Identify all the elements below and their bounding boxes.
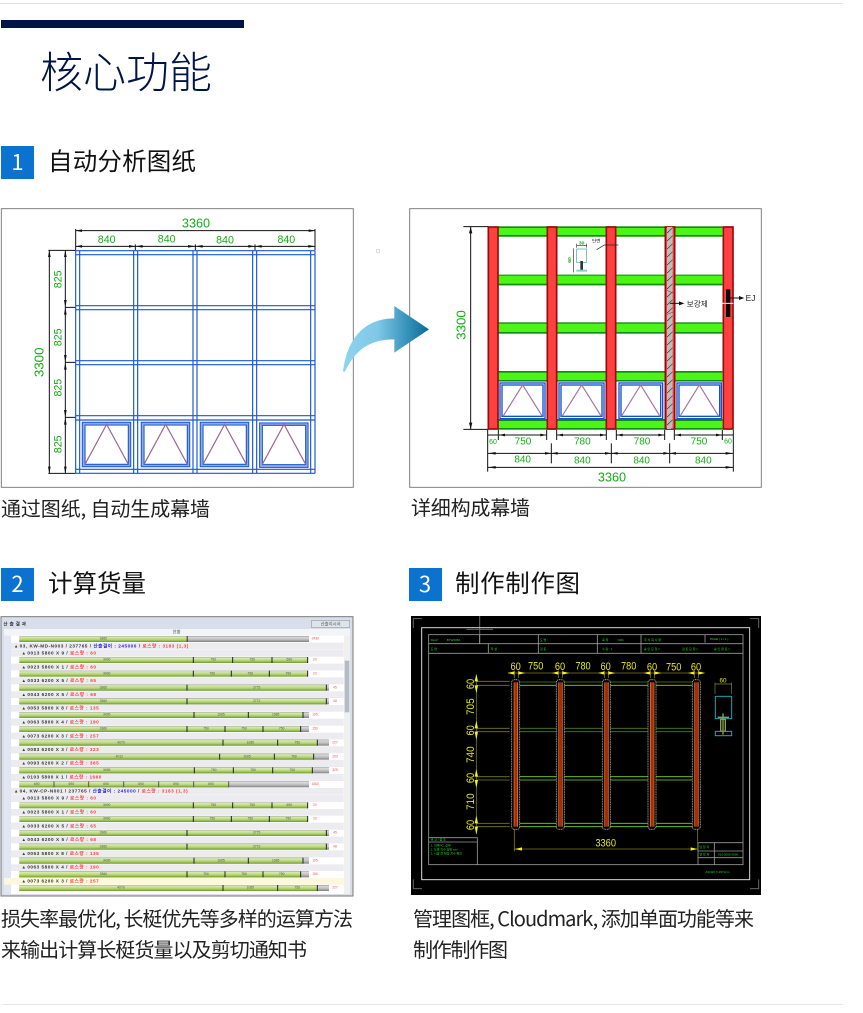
- row labels: [14, 642, 189, 884]
- inner frame and title block: [429, 635, 743, 865]
- dimension labels: 840: [98, 234, 116, 246]
- stock bars: 690: [34, 782, 40, 786]
- beams: [520, 682, 693, 827]
- dimension labels: 60: [555, 661, 565, 673]
- button: [312, 620, 350, 628]
- stock bars: 20: [313, 817, 317, 821]
- stock bars: 20: [313, 803, 317, 807]
- caption 4: 管理图框, Cloudmark, 添加单面功能等来: [413, 903, 754, 932]
- stock bars: 750: [248, 671, 253, 675]
- row labels: ▴ 0073 6200 X 3 / 로스량 : 257: [22, 732, 99, 738]
- callout: reinforcement: 보강제: [687, 298, 708, 308]
- stock bars: 3490: [103, 817, 111, 821]
- row labels: ▴ 0023 5800 X 1 / 로스량 : 60: [22, 663, 96, 669]
- stock bars: 2430: [312, 637, 319, 641]
- title block text: 1. 하부PC, 상부: [431, 842, 451, 847]
- dimension labels: 840: [633, 455, 650, 466]
- scrollbar: [344, 636, 350, 894]
- dimension labels: [453, 310, 732, 484]
- title block text: 축 척 : CM1: [602, 637, 624, 642]
- dimension labels: 750: [515, 437, 532, 448]
- section 1 heading: 1: [11, 145, 24, 177]
- windows: [82, 422, 308, 467]
- dimension labels: 60: [691, 662, 701, 674]
- stock bars: 3360: [100, 685, 107, 689]
- dimension labels: 60: [465, 773, 477, 783]
- stock bars: 1085: [217, 713, 225, 717]
- stock bars: 3490: [103, 671, 111, 675]
- dimension labels: 780: [575, 661, 591, 673]
- row labels: ▴ 04, KW-CP-N001 / 237765 / 산출결이 : 245000 / 로스량 : 3183 (1,3): [14, 788, 188, 795]
- stock bars: 750: [250, 768, 256, 772]
- stock bars: 750: [241, 872, 247, 876]
- dimension labels: 825: [53, 435, 65, 453]
- windows: [499, 382, 722, 419]
- title accent bar: [1, 20, 244, 28]
- title block text: Rev# : BTW2050: [431, 638, 460, 642]
- panel: CAD drawing: [411, 616, 761, 895]
- caption 3: 损失率最优化, 长梃优先等多样的运算方法: [1, 903, 353, 932]
- dimension labels: 710: [465, 793, 477, 810]
- title: 核心功能: [40, 39, 212, 101]
- stock bars: 750: [286, 817, 291, 821]
- button: 산출지시서: [321, 621, 341, 628]
- section detail inset: 단면: [592, 237, 601, 243]
- outer frame: [422, 628, 750, 880]
- title block text: 주 식 회 사 ㈜: [644, 637, 661, 642]
- stock bars: 750: [250, 803, 255, 807]
- title block text: 도 면 :: [431, 646, 439, 651]
- stock bars: 325: [332, 768, 338, 772]
- stock bars: 48: [333, 844, 337, 848]
- dimension labels: 3300: [32, 348, 47, 377]
- row labels: ▴ 0063 5800 X 4 / 로스량 : 190: [22, 718, 99, 724]
- dimension labels: [32, 217, 295, 453]
- stock bars: 750: [279, 727, 285, 731]
- stock bars: 750: [203, 727, 209, 731]
- stock bars: 750: [211, 658, 216, 662]
- section detail inset: [567, 237, 618, 272]
- stock bars: 1600: [312, 782, 319, 786]
- dimension labels: 60: [465, 679, 477, 689]
- hatched reinforced column: [665, 227, 675, 429]
- row labels: ▴ 0053 5800 X 8 / 로스량 : 135: [22, 850, 99, 856]
- bottom rule: [2, 1004, 843, 1005]
- stock bars: 3495: [103, 768, 111, 772]
- stock bars: 1085: [243, 754, 251, 758]
- stock bars: 3360: [100, 872, 107, 876]
- stock bars: 2772: [253, 699, 261, 703]
- dimension labels: 3360: [182, 217, 210, 231]
- callout: EJ: EJ: [746, 293, 755, 303]
- stock bars: 3490: [103, 658, 111, 662]
- panel: quantity calculation screen: 산출결과: [3, 621, 27, 628]
- dimension labels: 60: [724, 439, 732, 446]
- title block text: PAGE ( 1 / 1 ): [710, 637, 728, 641]
- stock bars: 750: [211, 768, 217, 772]
- stock bars: 227: [332, 740, 338, 744]
- stock bars: 690: [173, 782, 179, 786]
- section detail: [715, 677, 732, 736]
- title block text: 도 명 :: [540, 637, 548, 642]
- stock bars: 750: [210, 817, 215, 821]
- top rule: [0, 3, 843, 4]
- stock bars: 690: [287, 658, 292, 662]
- section 1 heading: 自动分析图纸: [48, 143, 196, 178]
- caption 3: [1, 903, 353, 963]
- row labels: ▴ 0043 6200 X 5 / 로스량 : 68: [22, 836, 96, 842]
- stock bars: 1085: [272, 858, 280, 862]
- stock bars: [19, 636, 338, 891]
- dimension labels: 60: [465, 820, 477, 830]
- columns: [512, 680, 700, 829]
- dimension labels: 3360: [595, 837, 616, 849]
- stock bars: 750: [286, 671, 291, 675]
- dimension labels: 840: [216, 234, 234, 246]
- stock bars: 3495: [103, 858, 111, 862]
- row labels: ▴ 0023 5800 X 1 / 로스량 : 60: [22, 808, 96, 814]
- stock bars: 3490: [103, 803, 111, 807]
- stock bars: 1085: [272, 713, 280, 717]
- stock bars: 105: [312, 858, 318, 862]
- stock bars: 45: [333, 685, 337, 689]
- title block text: 검 토 :: [540, 646, 548, 651]
- stock bars: 4012: [116, 754, 123, 758]
- section detail inset: 60: [567, 257, 573, 263]
- dimension labels: 3360: [598, 470, 626, 484]
- section detail: 60: [719, 677, 727, 684]
- dimension labels: 750: [666, 662, 681, 674]
- panel: quantity calculation screen: [1, 617, 353, 896]
- dimension labels: 750: [528, 661, 543, 673]
- row labels: ▴ 0033 6200 X 5 / 로스량 : 65: [22, 677, 96, 683]
- stock bars: 690: [138, 782, 144, 786]
- curtain wall grid: [76, 250, 315, 473]
- dimension labels: 705: [465, 698, 477, 715]
- stock bars: 750: [241, 727, 247, 731]
- dimension labels: 60: [510, 661, 521, 673]
- panel: detailed drawing: [410, 209, 761, 487]
- row labels: ▴ 0083 6200 X 3 / 로스량 : 323: [22, 746, 99, 752]
- title block text: 작 성 :: [491, 646, 499, 651]
- stock bars: 2775: [253, 831, 261, 835]
- dimension arrows: [475, 671, 705, 851]
- panel: quantity calculation screen: 현황: [173, 629, 181, 635]
- row labels: ▴ 0103 5800 X 1 / 로스량 : 1660: [22, 774, 102, 780]
- section 2 heading: [1, 565, 146, 601]
- stock bars: 690: [287, 803, 292, 807]
- stock bars: 227: [332, 886, 338, 890]
- dimension labels: 60: [647, 662, 657, 674]
- title block text: 비 고 / 참 조: [431, 837, 446, 842]
- stock bars: 750: [291, 754, 297, 758]
- stock bars: 750: [210, 671, 215, 675]
- dimension lines: [463, 227, 733, 472]
- stock bars: 2775: [253, 685, 261, 689]
- stock bars: 293: [332, 754, 338, 758]
- title block text: A3(420 X 297)mm: [705, 870, 730, 874]
- dimension labels: 825: [53, 270, 65, 288]
- dimension labels: 840: [277, 234, 295, 246]
- stock bars: 3360: [100, 831, 107, 835]
- row labels: ▴ 0033 6200 X 5 / 로스량 : 65: [22, 822, 96, 828]
- stock bars: 20: [313, 658, 317, 662]
- title block text: 승 인 요 청 □: [644, 646, 660, 651]
- caption 1: 通过图纸, 自动生成幕墙: [1, 493, 210, 522]
- title block text: 승 인 완 료 □: [714, 646, 730, 651]
- row labels: ▴ 03, KW-MD-N003 / 237765 / 산출결이 : 245000 / 로스량 : 3183 (1,3): [14, 642, 189, 649]
- stock bars: 750: [203, 872, 209, 876]
- row labels: ▴ 0063 5800 X 4 / 로스량 : 190: [22, 864, 99, 870]
- title block text: [431, 637, 739, 874]
- caption 4: 制作制作图: [413, 934, 508, 963]
- dimension labels: 740: [465, 746, 477, 763]
- stock bars: 1085: [217, 858, 225, 862]
- stock bars: 750: [290, 768, 295, 772]
- title block text: 연 락 처: [699, 851, 709, 856]
- row labels: ▴ 0013 5800 X 9 / 로스량 : 60: [22, 649, 96, 655]
- stock bars: 690: [69, 782, 74, 786]
- stock bars: 3360: [100, 844, 107, 848]
- dimension labels: 60: [600, 661, 611, 673]
- stock bars: 750: [279, 872, 285, 876]
- stock bars: 3360: [100, 699, 107, 703]
- stock bars: 1085: [247, 886, 254, 890]
- title block text: 3. 시공 전 현장 치수 확인: [431, 850, 462, 855]
- caption 4: [413, 903, 754, 963]
- corner marks: [413, 616, 759, 889]
- stock bars: 105: [312, 713, 318, 717]
- dimension labels: 825: [53, 328, 65, 346]
- dimension labels: 825: [53, 379, 65, 397]
- stock bars: 4070: [117, 886, 125, 890]
- row labels: ▴ 0053 5800 X 8 / 로스량 : 135: [22, 705, 99, 711]
- stock bars: 48: [333, 699, 337, 703]
- stock bars: 4070: [117, 740, 125, 744]
- caption 2: 详细构成幕墙: [411, 492, 530, 521]
- stock bars: 150: [312, 727, 318, 731]
- dimension labels: 840: [158, 233, 176, 245]
- stock bars: 690: [103, 782, 109, 786]
- stock bars: 750: [295, 886, 300, 890]
- caption 3: 来输出计算长梃货量以及剪切通知书: [1, 934, 307, 963]
- dimension labels: [465, 661, 701, 849]
- section 3 heading: 3: [419, 567, 431, 599]
- dimension leaders: [476, 671, 701, 851]
- dimension labels: 60: [465, 725, 477, 735]
- callout: reinforcement: [670, 298, 708, 308]
- row labels: ▴ 0073 6200 X 3 / 로스량 : 257: [22, 878, 99, 884]
- panel: source drawing: [1, 209, 353, 487]
- section 2 heading: 2: [11, 567, 24, 599]
- stock bars: 750: [250, 658, 255, 662]
- dimension labels: 780: [574, 436, 591, 447]
- title block text: 2. 도면 치수 단위 mm: [431, 846, 458, 851]
- title block text: 담 당 자: [699, 844, 709, 849]
- dimension lines: [48, 229, 315, 473]
- section 2 heading: 计算货量: [48, 565, 146, 600]
- row labels: ▴ 0093 6200 X 2 / 로스량 : 365: [22, 760, 99, 766]
- green beams: [498, 227, 722, 429]
- stock bars: 750: [248, 817, 253, 821]
- stock bars: 20: [313, 671, 317, 675]
- dimension labels: 780: [634, 436, 651, 447]
- dimension labels: 840: [695, 455, 712, 466]
- title block text: 수 량 : 1: [602, 646, 613, 651]
- section detail inset: 30: [579, 240, 585, 246]
- dimension labels: 840: [514, 455, 531, 466]
- section 3 heading: 制作制作图: [455, 565, 580, 600]
- row labels: ▴ 0043 6200 X 5 / 로스량 : 68: [22, 691, 96, 697]
- stock bars: 750: [295, 740, 300, 744]
- arrow: [343, 306, 429, 372]
- title block text: 검 토 요 청 □: [682, 646, 698, 651]
- stock bars: 690: [208, 782, 214, 786]
- stock bars: 3495: [103, 713, 111, 717]
- dimension labels: 750: [691, 437, 708, 448]
- stock bars: 3360: [100, 637, 107, 641]
- title block text: 010-0000-0000: [718, 852, 739, 856]
- dimension labels: 3300: [453, 310, 468, 340]
- small marker: [376, 250, 380, 252]
- dimension labels: 840: [574, 455, 591, 466]
- dimension labels: 60: [489, 439, 497, 446]
- callout: EJ: [722, 289, 755, 317]
- stock bars: 750: [211, 803, 216, 807]
- red columns: [488, 227, 733, 429]
- dimension labels: 780: [621, 661, 636, 673]
- stock bars: 1085: [247, 740, 254, 744]
- stock bars: 150: [312, 872, 318, 876]
- stock bars: 2772: [253, 844, 261, 848]
- stock bars: 3360: [100, 727, 107, 731]
- stock bars: 45: [333, 831, 337, 835]
- alternating rows: [11, 643, 344, 871]
- row labels: ▴ 0013 5800 X 9 / 로스량 : 60: [22, 795, 96, 801]
